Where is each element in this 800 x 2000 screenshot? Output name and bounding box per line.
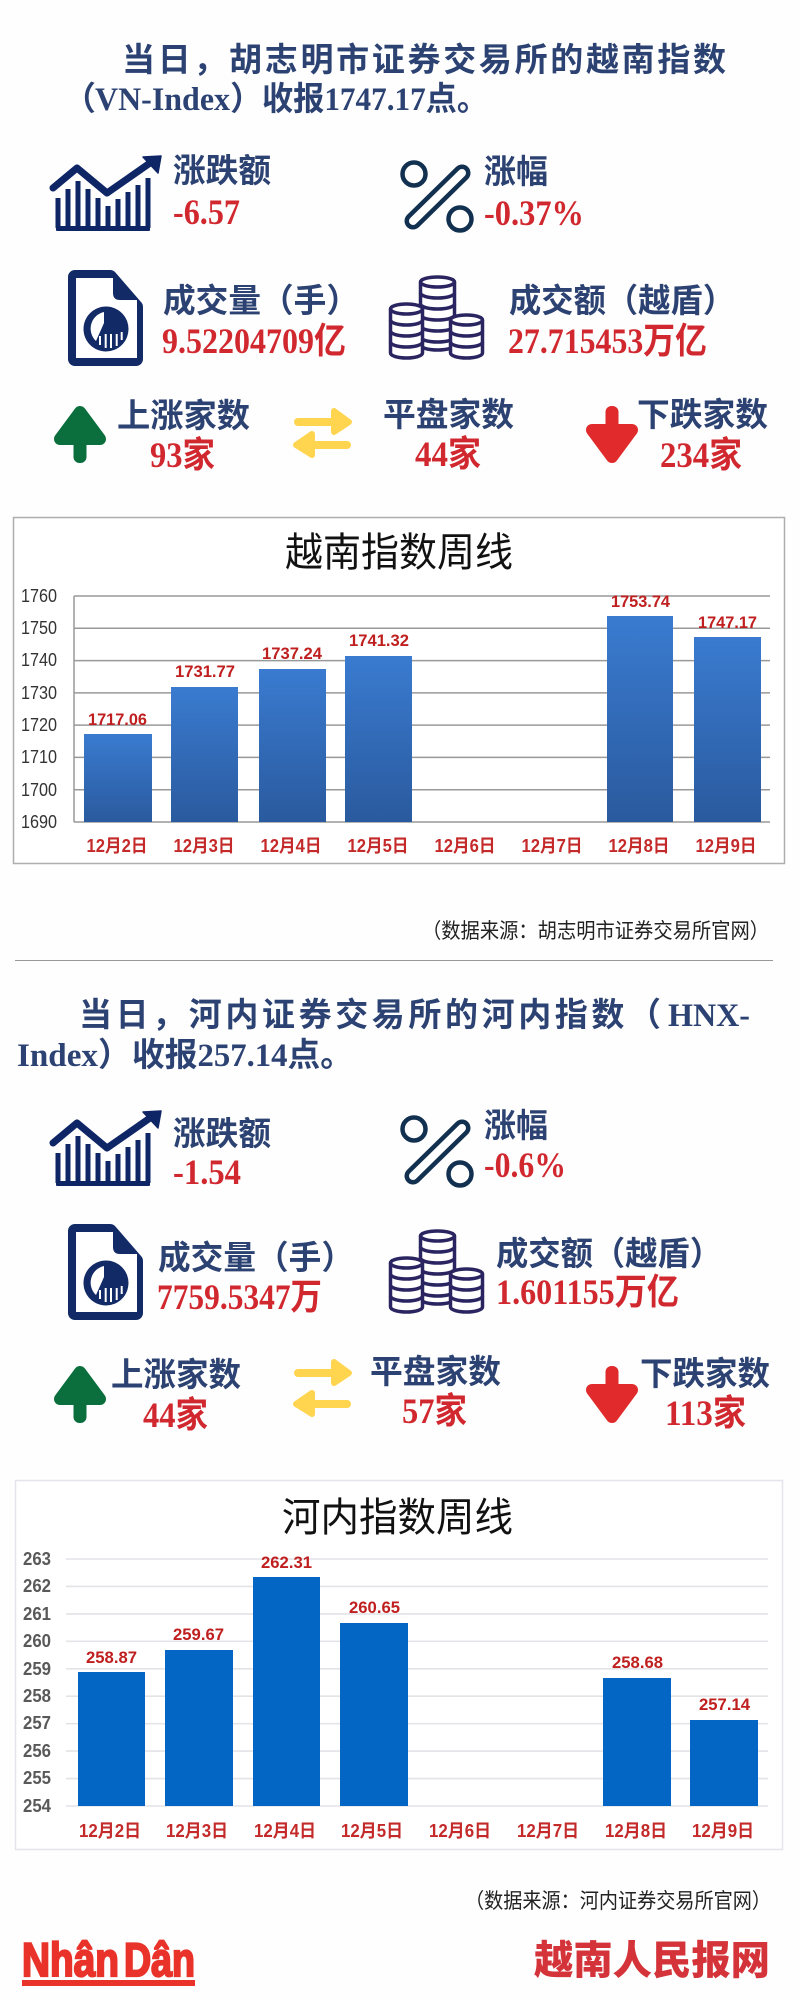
- stat: decliners: 113家: [665, 1393, 746, 1433]
- bar chart: VN-Index weekly: 1747.17: [698, 613, 757, 632]
- stat: decliners: [640, 1355, 770, 1433]
- stat: change amount: -6.57: [173, 192, 240, 232]
- bar chart: HNX-Index weekly: 260.65: [349, 1598, 400, 1617]
- bar chart: VN-Index weekly: 1741.32: [349, 631, 409, 650]
- bar chart: HNX-Index weekly: 12月4日: [254, 1821, 316, 1841]
- bar chart: HNX-Index weekly: 262.31: [261, 1553, 312, 1572]
- bar chart: HNX-Index weekly: 12月2日: [79, 1821, 141, 1841]
- bar chart: HNX-Index weekly: 12月9日: [692, 1821, 754, 1841]
- bar chart: HNX-Index weekly: 263: [23, 1549, 51, 1569]
- bar chart: VN-Index weekly: 12月9日: [696, 836, 756, 856]
- icon: document: [68, 1224, 143, 1320]
- stat: change percent: -0.6%: [484, 1145, 566, 1185]
- stat: decliners: 234家: [660, 435, 742, 475]
- stat: unchanged: 平盘家数: [383, 396, 514, 433]
- stat: change amount: 涨跌额: [173, 1115, 271, 1152]
- bar chart: VN-Index weekly: 1710: [21, 747, 57, 767]
- title: HNX-Index: 当日，河内证券交易所的河内指数（: [79, 997, 661, 1034]
- stat: change amount: 涨跌额: [173, 152, 271, 189]
- bar chart: VN-Index weekly: 1731.77: [175, 662, 235, 681]
- bar chart: HNX-Index weekly: 12月6日: [429, 1821, 491, 1841]
- bar chart: HNX-Index weekly: 12月3日: [166, 1821, 228, 1841]
- bar chart: HNX-Index weekly: 259: [23, 1659, 51, 1679]
- bar chart: VN-Index weekly: 1720: [21, 715, 57, 735]
- icon: percent: [402, 162, 472, 230]
- bar chart: VN-Index weekly: [14, 518, 784, 864]
- icon: coins: [390, 1231, 482, 1312]
- bar chart: VN-Index weekly: 1737.24: [262, 644, 323, 663]
- stat: unchanged: 平盘家数: [370, 1353, 501, 1390]
- bar chart: HNX-Index weekly: 262: [23, 1576, 51, 1596]
- title: VN-Index: ）: [230, 82, 263, 118]
- icon: up arrow: [60, 1372, 100, 1423]
- stat: change amount: -1.54: [173, 1152, 241, 1192]
- stat: advancers: 上涨家数: [117, 397, 250, 434]
- stat: unchanged: [383, 396, 514, 474]
- bar chart: HNX-Index weekly: 12月8日: [605, 1821, 667, 1841]
- bar chart: VN-Index weekly: 12月3日: [174, 836, 234, 856]
- bar chart: HNX-Index weekly: 261: [23, 1604, 51, 1624]
- bar chart: VN-Index weekly: 1750: [21, 618, 57, 638]
- stat: turnover: 1.601155万亿: [496, 1272, 679, 1312]
- bar chart: HNX-Index weekly: 12月7日: [517, 1821, 579, 1841]
- logo: Nhan Dan: Dân: [124, 1933, 195, 1986]
- stat: decliners: 下跌家数: [637, 396, 768, 433]
- bar chart: HNX-Index weekly: 256: [23, 1741, 51, 1761]
- stat: decliners: [637, 396, 768, 475]
- bar chart: VN-Index weekly: 1717.06: [88, 710, 147, 729]
- bar chart: VN-Index weekly: 1730: [21, 683, 57, 703]
- stat: advancers: 上涨家数: [111, 1356, 241, 1393]
- bar chart: VN-Index weekly: 12月5日: [348, 836, 408, 856]
- logo: Nhan Dan: [22, 1933, 195, 1986]
- stat: turnover: 成交额（越盾）: [496, 1235, 722, 1272]
- icon: percent: [402, 1118, 472, 1186]
- bar chart: VN-Index weekly: 12月7日: [522, 836, 582, 856]
- bar chart: HNX-Index weekly: 12月5日: [341, 1821, 403, 1841]
- stat: change percent: 涨幅: [484, 153, 548, 190]
- icon: down arrow: [592, 1366, 632, 1417]
- stat: advancers: [111, 1356, 241, 1435]
- stat: change percent: 涨幅: [484, 1107, 548, 1144]
- stat: advancers: [117, 397, 250, 475]
- stat: unchanged: 57家: [402, 1391, 467, 1431]
- title: HNX-Index: ）: [98, 1038, 131, 1074]
- stat: volume: 成交量（手）: [158, 1239, 354, 1276]
- stat: turnover: [496, 1235, 722, 1312]
- bar chart: HNX-Index weekly: 254: [23, 1796, 51, 1816]
- bar chart: VN-Index weekly: 12月4日: [260, 836, 322, 856]
- icon: rising chart: [53, 156, 161, 231]
- bar chart: HNX-Index weekly: 258.87: [86, 1648, 137, 1667]
- stat: volume: [157, 1239, 354, 1317]
- stat: unchanged: [370, 1353, 501, 1431]
- chart title: 越南指数周线: [285, 531, 513, 575]
- title: VN-Index: （: [63, 82, 96, 118]
- stat: change amount: [173, 1115, 271, 1192]
- icon: down arrow: [592, 406, 632, 457]
- source note: HNX: （数据来源：河内证券交易所官网）: [465, 1890, 771, 1913]
- icon: rising chart: [53, 1111, 161, 1186]
- bar chart: VN-Index weekly: 12月8日: [608, 836, 670, 856]
- stat: advancers: 44家: [143, 1395, 208, 1435]
- stat: volume: [162, 282, 359, 361]
- bar chart: VN-Index weekly: 1740: [21, 650, 57, 670]
- bar chart: HNX-Index weekly: 260: [23, 1631, 51, 1651]
- bar chart: HNX-Index weekly: 258: [23, 1686, 51, 1706]
- bar chart: VN-Index weekly: 1760: [21, 586, 57, 606]
- title: VN-Index: 收报1747.17点。: [262, 81, 488, 118]
- bar chart: VN-Index weekly: 12月2日: [86, 836, 148, 856]
- bar chart: HNX-Index weekly: 257.14: [699, 1695, 751, 1714]
- stat: turnover: [508, 282, 735, 361]
- logo: Chinese masthead: 越南人民报网: [534, 1939, 770, 1983]
- stat: advancers: 93家: [150, 435, 215, 475]
- icon: up arrow: [60, 412, 100, 463]
- stat: volume: 成交量（手）: [163, 282, 359, 319]
- stat: turnover: 27.715453万亿: [508, 321, 707, 361]
- stat: unchanged: 44家: [415, 434, 481, 474]
- icon: swap arrows: [294, 411, 351, 455]
- chart title: 河内指数周线: [282, 1496, 513, 1540]
- bar chart: VN-Index weekly: 1690: [21, 812, 57, 832]
- icon: swap arrows: [294, 1362, 351, 1414]
- title: VN-Index: 当日，胡志明市证券交易所的越南指数: [122, 42, 726, 79]
- bar chart: HNX-Index weekly: 259.67: [173, 1625, 224, 1644]
- bar chart: HNX-Index weekly: 258.68: [612, 1653, 663, 1672]
- icon: document: [68, 270, 143, 366]
- stat: volume: 7759.5347万: [157, 1277, 322, 1317]
- bar chart: HNX-Index weekly: 255: [23, 1768, 51, 1788]
- stat: change percent: [484, 1107, 566, 1185]
- title: VN-Index: [63, 42, 726, 118]
- logo: Nhan Dan: Nhân: [22, 1933, 119, 1986]
- title: HNX-Index: Index: [17, 1038, 98, 1074]
- stat: change percent: [484, 153, 584, 233]
- source note: HOSE: （数据来源：胡志明市证券交易所官网）: [422, 920, 769, 943]
- bar chart: VN-Index weekly: 1700: [21, 780, 57, 800]
- title: HNX-Index: [17, 997, 750, 1074]
- bar chart: HNX-Index weekly: 257: [23, 1713, 51, 1733]
- title: HNX-Index: HNX-: [668, 998, 750, 1034]
- stat: volume: 9.52204709亿: [162, 321, 346, 361]
- stat: change amount: [173, 152, 271, 232]
- icon: coins: [390, 277, 482, 358]
- bar chart: VN-Index weekly: 1753.74: [611, 592, 671, 611]
- stat: decliners: 下跌家数: [640, 1355, 770, 1392]
- bar chart: VN-Index weekly: 12月6日: [434, 836, 496, 856]
- stat: change percent: -0.37%: [484, 193, 584, 233]
- bar chart: HNX-Index weekly: [16, 1480, 782, 1850]
- stat: turnover: 成交额（越盾）: [509, 282, 735, 319]
- title: HNX-Index: 收报257.14点。: [132, 1037, 353, 1074]
- title: VN-Index: VN-Index: [95, 82, 230, 118]
